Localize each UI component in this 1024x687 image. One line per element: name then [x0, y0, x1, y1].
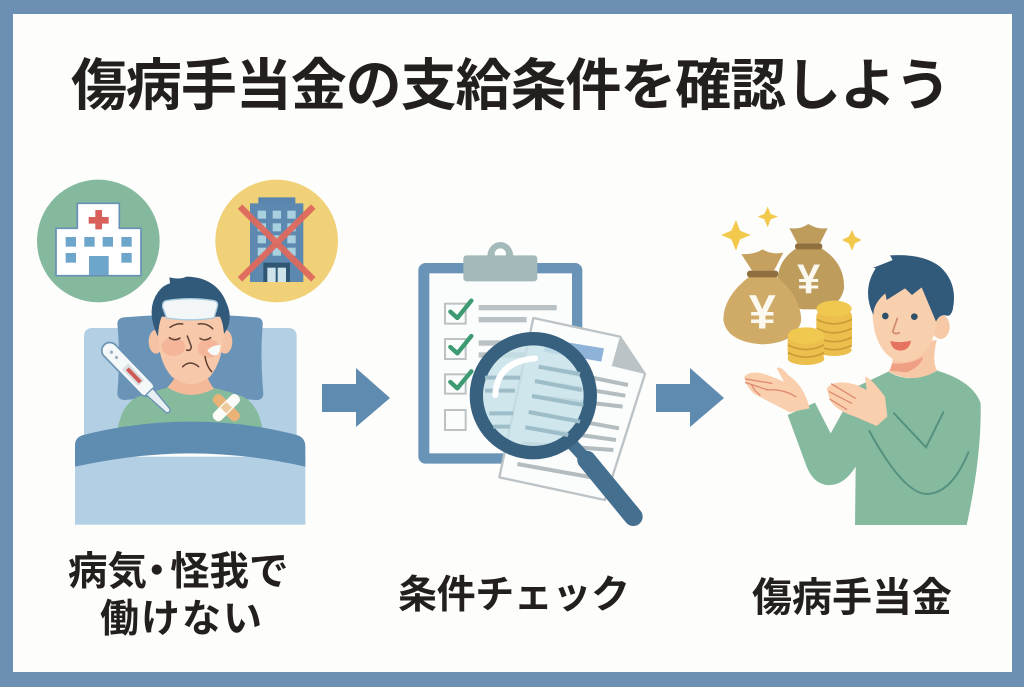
panel: condition check: [418, 242, 645, 517]
icon: back money bag: [778, 224, 844, 311]
ear: [932, 314, 950, 339]
label: step 1: 怪我で: [170, 550, 288, 594]
neck: [888, 340, 937, 378]
icon: bandage: [203, 384, 250, 431]
label: step 3: 傷病手当金: [752, 576, 952, 620]
person: [744, 255, 981, 525]
icon: blanket: [75, 422, 305, 525]
label: step 1: ・: [137, 550, 176, 594]
face features: [882, 313, 889, 319]
cooling pad: [163, 299, 218, 320]
icon: crossed-out office building: [215, 180, 338, 302]
neck: [167, 367, 214, 395]
label: step 1: 働けない: [100, 598, 262, 641]
label: step 1: [68, 550, 288, 641]
icon: front money bag: [723, 249, 801, 344]
hair: [152, 277, 230, 337]
label: step 2: 条件チェック: [398, 574, 630, 617]
icon: coin stacks: [788, 301, 852, 365]
label: step 1: 病気: [68, 550, 147, 594]
icon: clipboard: [418, 242, 582, 464]
icon: document: [499, 318, 645, 500]
eyes and mouth: [169, 324, 213, 372]
panel: benefit: [721, 207, 981, 525]
icon: front money bag: ¥: [749, 285, 776, 339]
icon: back money bag: ¥: [797, 257, 820, 303]
panel: sick in bed: [37, 180, 338, 525]
hair: [868, 255, 954, 322]
arrow: step 1 to step 2: [322, 368, 390, 427]
face: [158, 317, 223, 384]
sweater creases: [869, 412, 968, 494]
icon: magnifying glass: [476, 339, 633, 517]
face: [872, 277, 937, 361]
icon: sparkles: [721, 207, 862, 251]
icon: hospital badge: [37, 180, 160, 302]
title: 傷病手当金の支給条件を確認しよう: [71, 54, 951, 117]
right hand: [827, 377, 887, 426]
tissue: [207, 345, 221, 355]
ears: [149, 330, 163, 354]
arrow: step 2 to step 3: [656, 368, 724, 427]
sweater: [788, 371, 981, 525]
icon: thermometer: [98, 339, 175, 418]
left hand: [744, 367, 809, 412]
shirt: [117, 387, 263, 432]
icon: bed headboard: [84, 328, 297, 443]
icon: pillow: [117, 314, 263, 400]
patient: [117, 277, 263, 432]
